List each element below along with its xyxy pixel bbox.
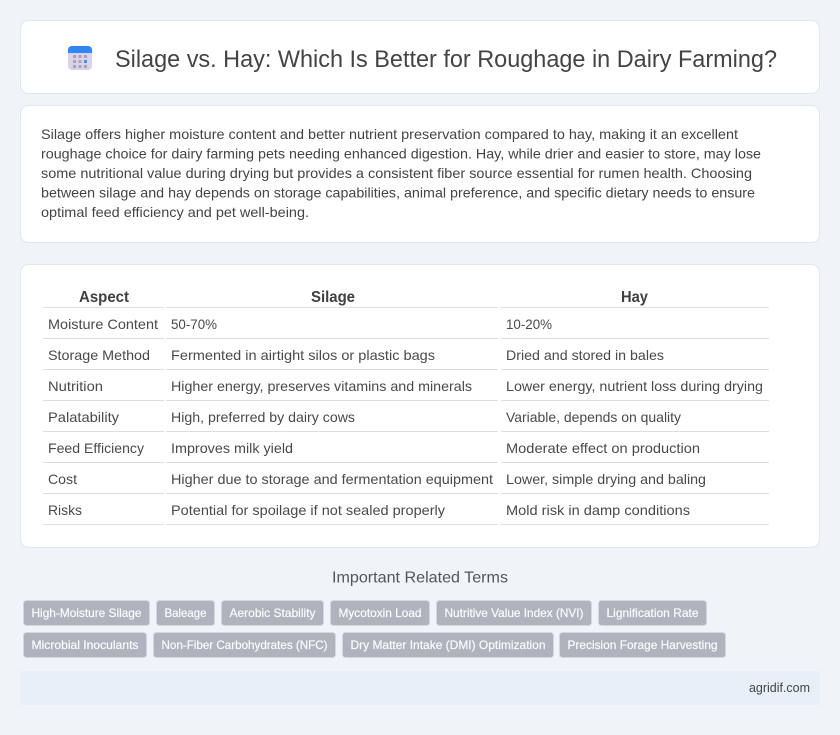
row: risks: Risks (48, 502, 82, 518)
row: feed efficiency: Feed Efficiency (48, 440, 144, 456)
title: Silage vs. Hay: Which Is Better for Roughage in Dairy Farming? (115, 46, 777, 73)
tag (560, 632, 726, 658)
tag: Non-Fiber Carbohydrates (NFC) (162, 638, 328, 652)
tag (598, 600, 706, 626)
text block: introduction: optimal feed efficiency and pet well-being. (41, 204, 309, 220)
tag: Microbial Inoculants (32, 638, 138, 652)
row: nutrition: Higher energy, preserves vitamins and minerals (171, 378, 472, 394)
row: palatability: Variable, depends on quality (506, 409, 681, 425)
tag (342, 632, 554, 658)
table header (79, 289, 648, 306)
row: storage method: Dried and stored in bales (506, 347, 664, 363)
row: risks: Mold risk in damp conditions (506, 502, 690, 518)
row: nutrition: Nutrition (48, 378, 103, 394)
tag: Mycotoxin Load (338, 606, 422, 620)
tag: Dry Matter Intake (DMI) Optimization (350, 638, 546, 652)
tag (222, 600, 324, 626)
row: cost: Lower, simple drying and baling (506, 471, 706, 487)
text block: introduction: between silage and hay depends on storage capabilities, animal preference, and specific dietary needs to ensure (41, 184, 755, 200)
row: storage method: Fermented in airtight silos or plastic bags (171, 347, 435, 363)
row: cost (48, 471, 706, 487)
footer (20, 671, 820, 705)
tag (154, 632, 336, 658)
table header: Silage (311, 289, 355, 306)
tags: related terms (24, 600, 726, 658)
text block: introduction: roughage choice for dairy farming pets needing enhanced digestion. Hay, while drier and easier to store, may lose (41, 146, 761, 162)
tag: Nutritive Value Index (NVI) (444, 606, 584, 620)
tag (330, 600, 430, 626)
row: nutrition: Lower energy, nutrient loss during drying (506, 378, 763, 394)
table header: Aspect (79, 289, 130, 306)
footer: agridif.com (749, 680, 810, 695)
row: moisture content: 10-20% (506, 316, 552, 332)
row: feed efficiency (48, 440, 700, 456)
tag: Lignification Rate (606, 606, 699, 620)
tag (24, 632, 146, 658)
row: palatability: High, preferred by dairy cows (171, 409, 355, 425)
row: feed efficiency: Moderate effect on production (506, 440, 700, 456)
row: risks: Potential for spoilage if not sealed properly (171, 502, 445, 518)
row: moisture content: Moisture Content (48, 316, 158, 332)
tag: High-Moisture Silage (32, 606, 142, 620)
row: cost: Higher due to storage and fermentation equipment (171, 471, 493, 487)
row: storage method: Storage Method (48, 347, 150, 363)
text block: introduction (41, 126, 761, 220)
row: feed efficiency: Improves milk yield (171, 440, 293, 456)
tag (24, 600, 150, 626)
tag (156, 600, 214, 626)
panel: title header (20, 20, 820, 94)
row: moisture content (48, 316, 552, 332)
row: palatability: Palatability (48, 409, 119, 425)
heading: important related terms: Important Related Terms (332, 570, 508, 586)
row: storage method (48, 347, 664, 363)
text block: introduction: Silage offers higher moisture content and better nutrient preservation compared to hay, making it an excellent (41, 126, 738, 142)
row: cost: Cost (48, 471, 77, 487)
tag: Precision Forage Harvesting (568, 638, 718, 652)
text block: introduction: some nutritional value during drying but provides a consistent fiber source essential for rumen health. Choosing (41, 165, 752, 181)
row: moisture content: 50-70% (171, 316, 217, 332)
icon: calendar (68, 46, 92, 70)
table header: Hay (621, 289, 648, 306)
row: nutrition (48, 378, 763, 394)
tag (436, 600, 592, 626)
panel: comparison table (20, 264, 820, 548)
row: risks (48, 502, 690, 518)
tag: Baleage (164, 606, 207, 620)
panel: introduction (20, 106, 820, 242)
tag: Aerobic Stability (230, 606, 316, 620)
row: palatability (48, 409, 681, 425)
